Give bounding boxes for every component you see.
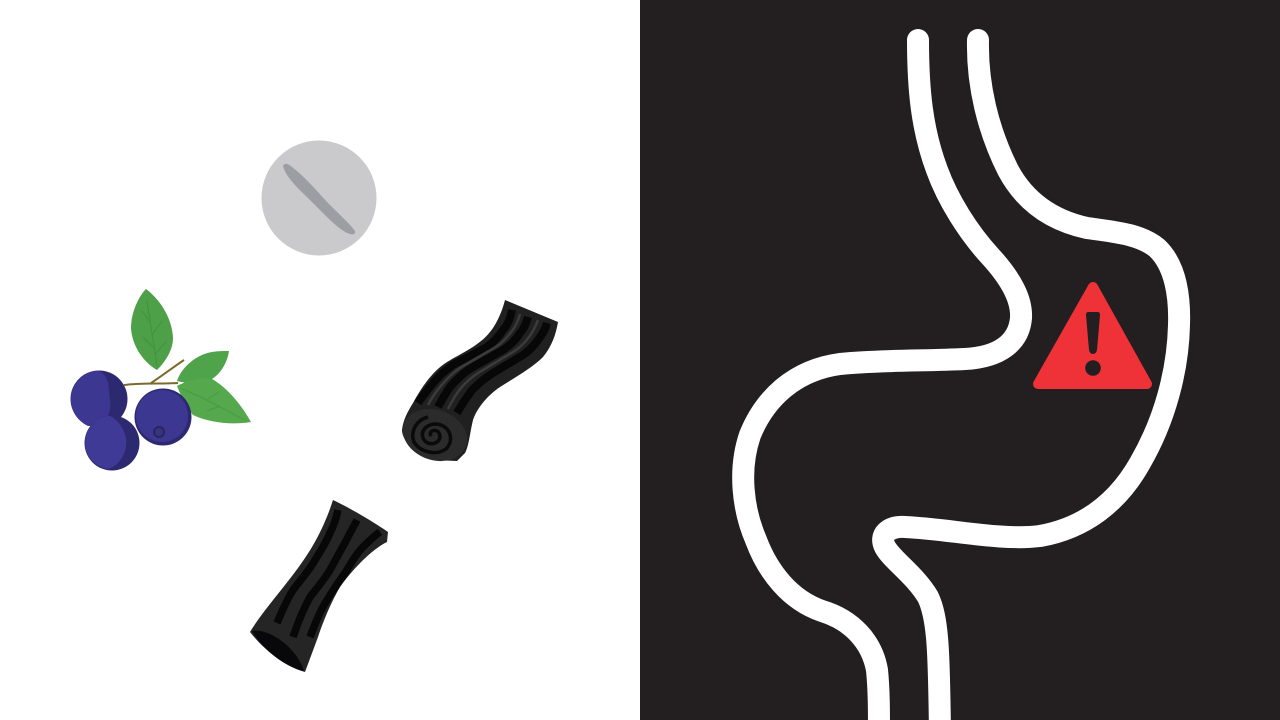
stomach right wall xyxy=(883,40,1179,720)
stems xyxy=(124,360,184,385)
berry: right xyxy=(134,388,192,446)
panel: right dark background xyxy=(640,0,1280,720)
cut end xyxy=(252,631,304,671)
panel: left white background xyxy=(0,0,640,720)
leaf: middle xyxy=(177,351,229,383)
icon: red warning triangle xyxy=(1038,287,1147,384)
ridges xyxy=(428,314,538,409)
grooves xyxy=(277,510,380,637)
stomach left wall xyxy=(743,40,1021,720)
grooves xyxy=(418,310,547,413)
icon: white tablet xyxy=(262,140,376,256)
icon: blueberries with leaves xyxy=(70,289,251,470)
icon: licorice tube piece xyxy=(250,500,388,672)
icon: stomach outline xyxy=(743,40,1179,720)
berry: bottom xyxy=(84,416,140,470)
leaf: lower xyxy=(177,378,251,423)
cut end xyxy=(395,400,475,470)
leaf: top xyxy=(131,289,173,370)
exclamation mark xyxy=(1086,312,1100,354)
icon: licorice spiral piece xyxy=(395,300,558,470)
berry: left top xyxy=(70,370,128,428)
